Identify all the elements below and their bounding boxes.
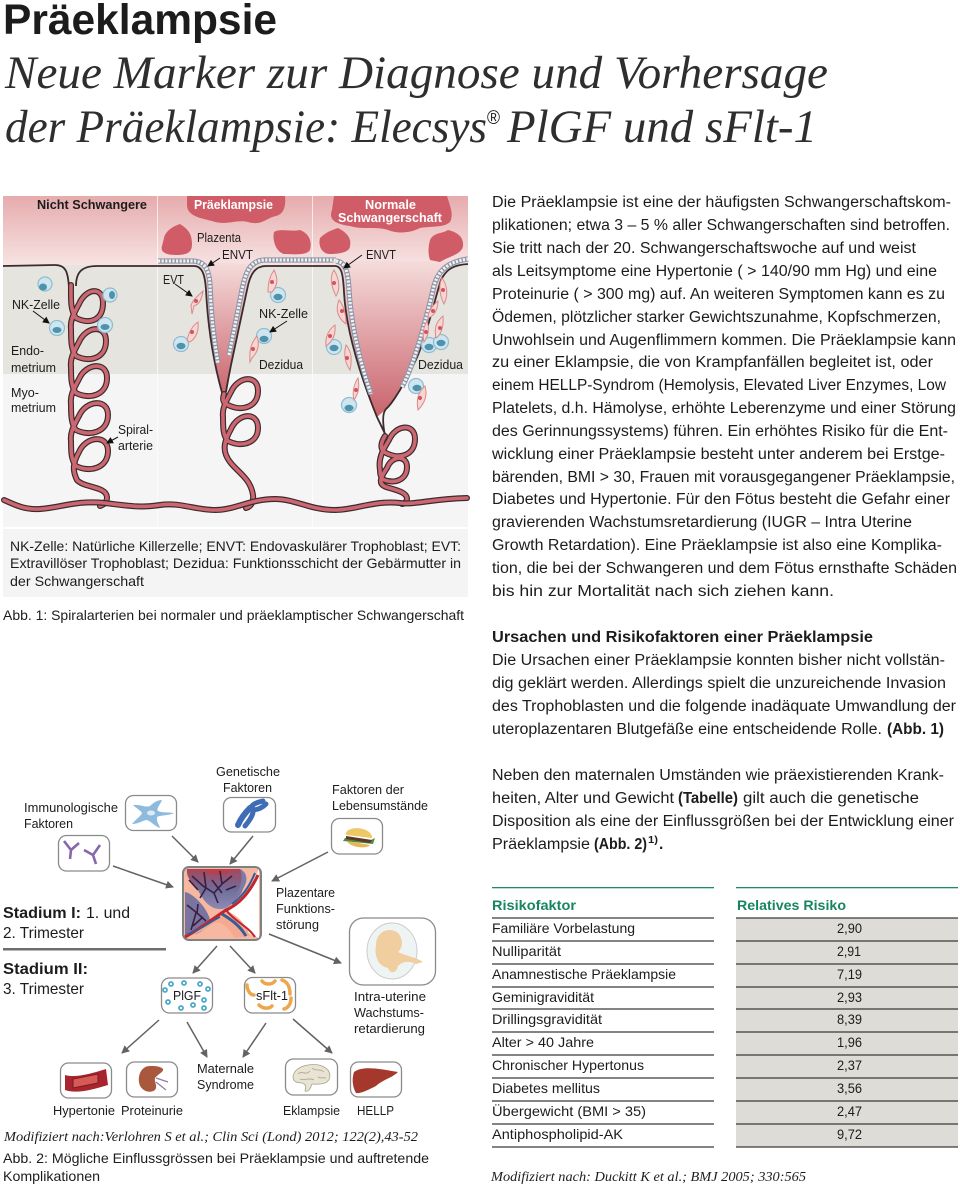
diagram labels: Schwangerschaft <box>338 210 443 225</box>
base artery <box>4 498 467 510</box>
section: causes and risk factors: Ursachen und Risikofaktoren einer Präeklampsie <box>492 629 873 646</box>
diagram labels: Dezidua <box>418 357 464 372</box>
relative risk values: 7,19 <box>837 966 862 982</box>
left artery opening <box>3 265 69 288</box>
risk factor names <box>492 920 676 1142</box>
intro text block: Diabetes und Hypertonie. Für den Fötus besteht die Gefahr einer <box>492 491 950 508</box>
maternal syndromes label: Maternale <box>197 1061 254 1076</box>
maternal syndromes label: Syndrome <box>197 1077 254 1092</box>
intro text block: Growth Retardation). Eine Präeklampsie ist also eine Komplika- <box>492 537 942 554</box>
placental dysfunction label: störung <box>276 917 319 932</box>
icon: brain <box>286 1059 338 1095</box>
icon: kidney <box>126 1062 178 1097</box>
label arrows <box>33 255 362 443</box>
diagram labels: metrium <box>11 360 56 375</box>
relative risk values: 9,72 <box>837 1126 862 1142</box>
relative risk values: 2,93 <box>837 989 862 1005</box>
spiral artery: preeclampsia <box>223 379 258 508</box>
diagram labels: Präeklampsie <box>194 197 273 212</box>
section: causes and risk factors: Die Ursachen einer Präeklampsie konnten bisher nicht vollstän- <box>492 652 945 669</box>
stage labels: 1. und <box>86 905 130 922</box>
title <box>3 0 828 153</box>
icon: antibodies <box>58 836 110 871</box>
intro text block: des Gerinnungssystems) führen. Ein erhöhtes Risiko für die Ent- <box>492 423 948 440</box>
risk factor names: Nulliparität <box>492 943 561 959</box>
text block: maternal factors: Neben den maternalen Umständen wie präexistierenden Krank- <box>492 767 944 784</box>
intro text block: bärenden, BMI > 30, Frauen mit vorausgegangener Präeklampsie, <box>492 469 955 486</box>
section: causes and risk factors: uteroplazentaren Blutgefäße eine entscheidende Rolle. <box>492 721 882 738</box>
section: causes and risk factors: des Trophoblasten und die folgende inadäquate Umwandlung der <box>492 698 956 715</box>
box: sFlt-1 <box>244 978 296 1013</box>
factor label: genetic <box>216 764 280 795</box>
risk factor names: Diabetes mellitus <box>492 1080 600 1096</box>
box: sFlt-1: sFlt-1 <box>256 988 288 1003</box>
text block: maternal factors: . <box>659 836 663 853</box>
intro text block <box>491 194 957 600</box>
NK cells <box>38 277 448 412</box>
table headers <box>492 897 846 913</box>
intro text block: gravierenden Wachstumsretardierung (IUGR – Intra Uterine <box>492 514 912 531</box>
caption box: abbreviations: der Schwangerschaft <box>10 573 144 589</box>
funnel: normal pregnancy <box>330 259 468 438</box>
relative risk values: 1,96 <box>837 1034 862 1050</box>
table rules <box>492 918 958 1147</box>
outcome labels: Hypertonie <box>53 1103 115 1118</box>
placental dysfunction label: Plazentare <box>276 885 335 900</box>
intro text block: als Leitsymptome eine Hypertonie ( > 140/90 mm Hg) und eine <box>492 263 937 280</box>
intro text block: Proteinurie ( > 300 mg) auf. An weiteren Symptomen kann es zu <box>492 286 945 303</box>
outcome labels: Eklampsie <box>283 1103 340 1118</box>
factor label: immunological <box>24 800 118 831</box>
risk factor names: Familiäre Vorbelastung <box>492 920 635 936</box>
risk factor names: Anamnestische Präeklampsie <box>492 966 676 982</box>
text block: maternal factors: Präeklampsie <box>492 836 590 853</box>
text block: maternal factors: Disposition als eine der Einflussgrößen bei der Entwicklung einer <box>492 813 954 830</box>
text block: maternal factors: (Abb. 2) <box>594 836 647 853</box>
diagram labels: Endo- <box>11 343 44 358</box>
risk factor names: Drillingsgravidität <box>492 1011 602 1027</box>
table headers: Relatives Risiko <box>737 897 846 913</box>
diagram labels: Myo- <box>11 385 39 400</box>
icon: burger <box>332 818 382 854</box>
flow arrows <box>113 836 341 1057</box>
fetus label <box>354 989 426 1036</box>
diagram labels: Dezidua <box>259 357 304 372</box>
caption box: abbreviations: NK-Zelle: Natürliche Killerzelle; ENVT: Endovaskulärer Trophoblast; EVT: <box>10 538 461 554</box>
risk factor names: Antiphospholipid-AK <box>492 1126 624 1142</box>
figure 1: spiral arteries diagram <box>3 196 468 527</box>
section: causes and risk factors: (Abb. 1) <box>887 721 944 738</box>
stage labels <box>3 905 166 998</box>
diagram labels: ENVT <box>222 247 253 262</box>
diagram labels: metrium <box>11 400 56 415</box>
factor label: genetic: Faktoren <box>223 780 272 795</box>
stage labels: 2. Trimester <box>3 925 85 942</box>
spiral artery: normal <box>380 427 415 504</box>
figure 2 caption: Komplikationen <box>3 1168 100 1184</box>
figure 1 caption: Abb. 1: Spiralarterien bei normaler und präeklamptischer Schwangerschaft <box>3 607 464 623</box>
title: ® <box>487 108 500 129</box>
risk factor names: Alter > 40 Jahre <box>492 1034 594 1050</box>
text block: maternal factors: heiten, Alter und Gewicht <box>492 790 675 807</box>
intro text block: Unwohlsein und Augenflimmern kommen. Die Präeklampsie kann <box>492 332 956 349</box>
intro text block: Sie tritt nach der 20. Schwangerschaftswoche auf und weist <box>492 240 917 257</box>
EVT cells <box>187 270 447 410</box>
factor label: immunological: Faktoren <box>24 816 73 831</box>
intro text block: einem HELLP-Syndrom (Hemolysis, Elevated Liver Enzymes, Low <box>492 377 947 394</box>
diagram labels: NK-Zelle <box>259 306 308 321</box>
title: PlGF und sFlt-1 <box>506 101 817 153</box>
relative risk values <box>837 920 862 1142</box>
diagram labels: Normale <box>365 197 416 212</box>
box: PlGF: PlGF <box>173 988 201 1003</box>
relative risk values: 2,90 <box>837 920 862 936</box>
icon: liver <box>350 1062 402 1097</box>
placental dysfunction label <box>276 885 335 932</box>
diagram labels: EVT <box>163 272 184 287</box>
figure 2: influence factors diagram <box>3 764 436 1118</box>
risk factor names: Chronischer Hypertonus <box>492 1057 644 1073</box>
funnel: preeclampsia <box>76 260 336 396</box>
figure 2 caption <box>3 1150 429 1184</box>
relative risk values: 3,56 <box>837 1080 862 1096</box>
intro text block: Ödemen, plötzlicher starker Gewichtszunahme, Kopfschmerzen, <box>492 308 941 326</box>
outcome labels: HELLP <box>357 1103 394 1118</box>
diagram labels: Nicht Schwangere <box>37 197 147 212</box>
risk factor names: Übergewicht (BMI > 35) <box>492 1102 646 1119</box>
caption box: abbreviations <box>3 529 468 597</box>
relative risk values: 8,39 <box>837 1011 862 1027</box>
outcome labels <box>53 1103 394 1118</box>
icon: immune cell <box>126 796 176 830</box>
title: Neue Marker zur Diagnose und Vorhersage <box>4 47 828 99</box>
placental dysfunction label: Funktions- <box>276 901 335 916</box>
section: causes and risk factors: dig geklärt werden. Allerdings spielt die unzureichende Invasion <box>492 675 946 692</box>
text block: maternal factors: gilt auch die genetische <box>743 790 919 807</box>
intro text block: wicklung einer Präeklampsie besteht unter anderem bei Erstge- <box>491 446 945 463</box>
table: risk factors <box>492 887 958 1147</box>
diagram labels: ENVT <box>366 247 396 262</box>
stage labels: 3. Trimester <box>3 981 85 998</box>
intro text block: tion, die bei der Schwangeren und dem Fötus ernsthafte Schäden <box>492 560 957 577</box>
icon: blood vessel <box>60 1063 112 1098</box>
text block: maternal factors: 1) <box>648 835 658 846</box>
intro text block: Platelets, d.h. Hämolyse, erhöhte Leberenzyme und einer Störung <box>492 400 956 417</box>
placenta tissue blobs <box>162 196 463 262</box>
factor label: immunological: Immunologische <box>24 800 118 815</box>
fetus label: Intra-uterine <box>354 989 426 1004</box>
title: der Präeklampsie: Elecsys <box>5 101 487 153</box>
intro text block: bis hin zur Mortalität nach sich ziehen kann. <box>492 583 834 600</box>
factor label: lifestyle: Lebensumstände <box>332 798 428 813</box>
stage labels: Stadium II: <box>3 961 88 978</box>
caption box: abbreviations: Extravillöser Trophoblast; Dezidua: Funktionsschicht der Gebärmutter in <box>10 555 461 571</box>
factor label: lifestyle: Faktoren der <box>332 782 405 797</box>
source note figure 2: Modifiziert nach:Verlohren S et al.; Clin Sci (Lond) 2012; 122(2),43-52 <box>3 1130 418 1145</box>
risk factor names: Geminigravidität <box>492 989 594 1005</box>
icon: placenta <box>183 867 261 940</box>
outcome labels: Proteinurie <box>121 1103 183 1118</box>
diagram labels: NK-Zelle <box>12 297 60 312</box>
stage labels: Stadium I: <box>3 905 81 922</box>
relative risk values: 2,47 <box>837 1103 862 1119</box>
source note table: Modifiziert nach: Duckitt K et al.; BMJ 2005; 330:565 <box>490 1170 806 1185</box>
relative risk values: 2,91 <box>837 943 861 959</box>
section: causes and risk factors <box>492 629 956 738</box>
box: PlGF <box>162 978 212 1013</box>
relative risk values: 2,37 <box>837 1057 862 1073</box>
maternal syndromes label <box>197 1061 254 1092</box>
diagram labels: arterie <box>118 438 153 453</box>
spiral artery: non-pregnant <box>71 285 108 506</box>
icon: fetus <box>350 918 436 985</box>
fetus label: Wachstums- <box>354 1005 424 1020</box>
factor label: lifestyle <box>332 782 428 813</box>
text block: maternal factors: (Tabelle) <box>678 790 738 807</box>
diagram labels: Plazenta <box>197 230 242 245</box>
factor label: genetic: Genetische <box>216 764 280 779</box>
intro text block: Die Präeklampsie ist eine der häufigsten Schwangerschaftskom- <box>492 194 951 211</box>
fetus label: retardierung <box>354 1021 425 1036</box>
icon: chromosome <box>224 798 276 832</box>
diagram labels <box>11 197 464 453</box>
table headers: Risikofaktor <box>492 897 577 913</box>
diagram labels: Spiral- <box>118 422 153 437</box>
text block: maternal factors <box>492 767 954 853</box>
figure 2 caption: Abb. 2: Mögliche Einflussgrössen bei Präeklampsie und auftretende <box>3 1150 429 1166</box>
intro text block: zu einer Eklampsie, die von Krampfanfällen begleitet ist, oder <box>492 354 933 371</box>
intro text block: plikationen; etwa 3 – 5 % aller Schwangerschaften sind betroffen. <box>492 217 950 234</box>
